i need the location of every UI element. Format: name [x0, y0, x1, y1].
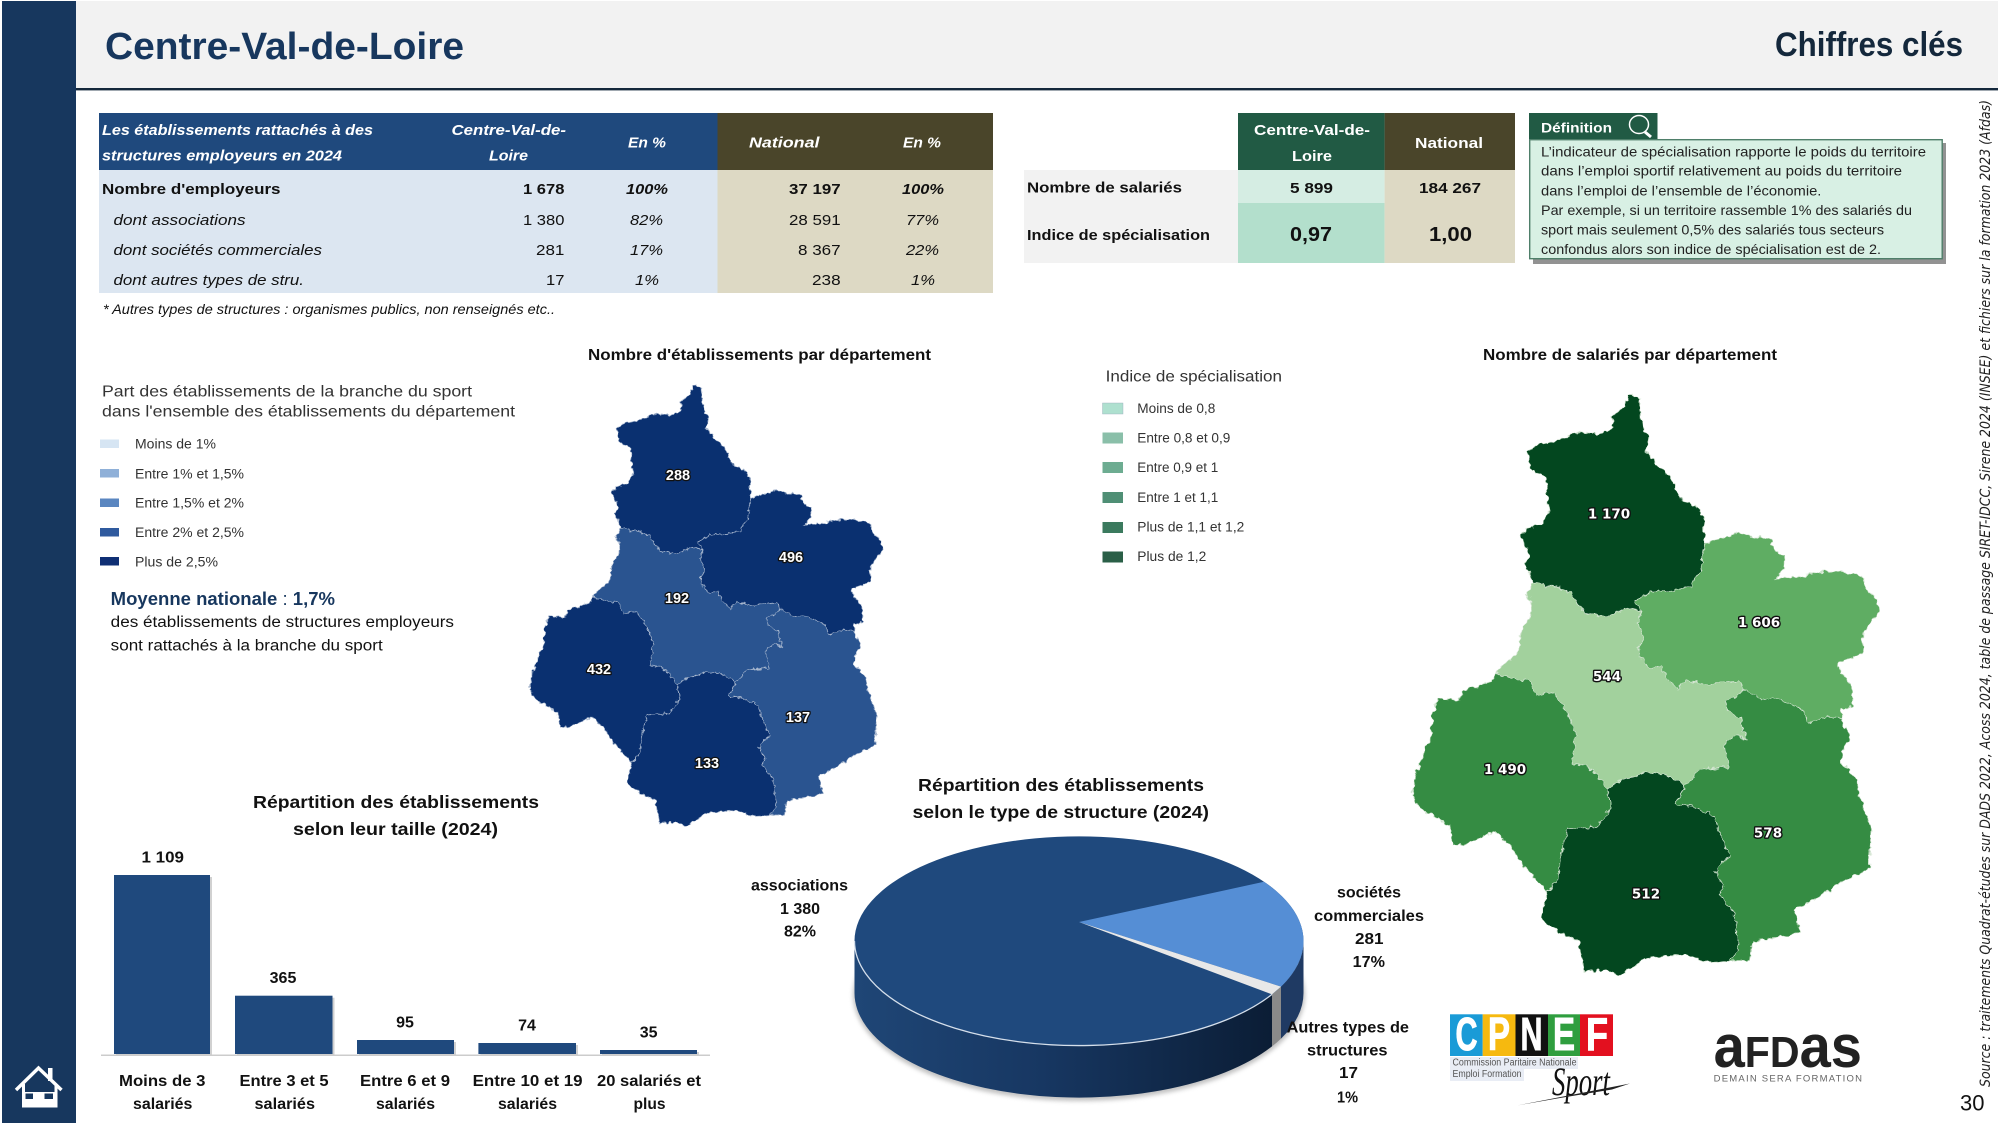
category labels: Entre 6 et 9 — [360, 1073, 450, 1090]
map labels: 1 490 — [1484, 762, 1526, 778]
table header: En % — [903, 135, 941, 152]
row: sociétés commerciales: dont sociétés commerciales — [114, 242, 323, 259]
row: autres types: dont autres types de stru. — [114, 272, 304, 289]
map labels: 496 — [779, 550, 803, 566]
definition text: dans l’emploi sportif relativement au poids du territoire — [1541, 163, 1902, 179]
table: salariés — [1024, 113, 1515, 263]
value labels: 35 — [640, 1025, 658, 1042]
row: sociétés commerciales — [114, 242, 939, 259]
category labels: 20 salariés et — [597, 1073, 702, 1090]
legend: part des établissements: Entre 2% et 2,5% — [135, 525, 244, 540]
row: associations: 77% — [906, 212, 939, 229]
table header: structures employeurs en 2024 — [102, 148, 343, 165]
category labels: Moins de 3 — [119, 1073, 206, 1090]
map labels: 288 — [666, 468, 690, 484]
chart title: selon le type de structure (2024) — [912, 802, 1209, 822]
header band — [76, 1, 1998, 90]
page number: 30 — [1960, 1091, 1984, 1116]
legend: indice de spécialisation: Entre 1 et 1,1 — [1137, 490, 1218, 505]
row: indice de spécialisation: 1,00 — [1429, 224, 1472, 246]
row: sociétés commerciales: 8 367 — [798, 242, 841, 259]
callout: définition — [1529, 113, 1946, 264]
3D pie — [853, 836, 1305, 1101]
logo: afdas: aFDas — [1714, 1013, 1862, 1080]
heading: map salariés: Nombre de salariés par département — [1483, 347, 1777, 364]
category labels: salariés — [498, 1096, 557, 1113]
title: Centre-Val-de-Loire — [105, 26, 464, 68]
row: employeurs: 100% — [626, 181, 668, 198]
row: associations: 82% — [630, 212, 663, 229]
label: associations: 1 380 — [780, 901, 820, 918]
row: indice de spécialisation: 0,97 — [1290, 224, 1332, 246]
chart title: selon leur taille (2024) — [293, 819, 498, 839]
row: employeurs: 37 197 — [789, 181, 841, 198]
logo: CPNEF: E — [1553, 1008, 1575, 1060]
label: associations: 82% — [784, 924, 816, 941]
legend: part des établissements: Plus de 2,5% — [135, 554, 218, 569]
category labels — [119, 1073, 702, 1113]
row: employeurs: Nombre d'employeurs — [102, 181, 280, 198]
table header — [102, 122, 941, 165]
category labels: Entre 10 et 19 — [473, 1073, 583, 1090]
legend: part des établissements: Entre 1,5% et 2% — [135, 496, 244, 511]
category labels: salariés — [133, 1096, 193, 1113]
map labels: 137 — [786, 710, 810, 726]
table: établissements — [99, 113, 993, 293]
row: employeurs: 1 678 — [523, 181, 564, 198]
row: sociétés commerciales: 17% — [630, 242, 663, 259]
label: associations: associations — [751, 878, 848, 895]
logo: CPNEF: Emploi Formation — [1452, 1069, 1522, 1080]
value labels: 95 — [396, 1015, 414, 1032]
sidebar — [2, 1, 76, 1123]
row: indice de spécialisation — [1027, 224, 1472, 246]
row: employeurs — [102, 181, 944, 198]
chart title — [253, 792, 539, 839]
value labels: 1 109 — [142, 850, 184, 867]
row: nombre de salariés: 184 267 — [1419, 180, 1481, 197]
logo: CPNEF: P — [1488, 1008, 1510, 1060]
row: associations: dont associations — [114, 212, 246, 229]
legend: indice de spécialisation: Entre 0,8 et 0,9 — [1137, 430, 1230, 446]
value labels — [142, 850, 658, 1042]
row: associations: 28 591 — [789, 212, 841, 229]
map labels: 192 — [665, 591, 689, 607]
map labels: 133 — [695, 756, 719, 772]
label: autres types de structures: structures — [1307, 1043, 1388, 1060]
icon: home — [16, 1068, 62, 1108]
row: nombre de salariés: Nombre de salariés — [1027, 180, 1182, 197]
legend: indice de spécialisation — [1102, 369, 1282, 564]
row: autres types: 1% — [635, 272, 659, 289]
definition text: L’indicateur de spécialisation rapporte le poids du territoire — [1541, 144, 1926, 160]
map: salariés par département — [1412, 393, 1879, 976]
category labels: salariés — [254, 1096, 315, 1113]
pie chart: type de structure — [751, 775, 1424, 1107]
map labels: 432 — [587, 662, 611, 678]
label: autres types de structures: 1% — [1337, 1090, 1358, 1107]
value labels: 74 — [518, 1018, 536, 1035]
legend: part des établissements — [100, 384, 516, 569]
row: autres types: 17 — [546, 272, 564, 289]
callout: moyenne nationale: des établissements de structures employeurs — [111, 614, 454, 631]
chart title: Répartition des établissements — [253, 792, 539, 812]
legend: part des établissements: dans l'ensemble des établissements du département — [102, 404, 516, 421]
map labels — [587, 468, 810, 772]
label: sociétés commerciales — [1314, 885, 1424, 971]
row: autres types: 1% — [911, 272, 935, 289]
bars — [114, 875, 699, 1054]
legend: indice de spécialisation: Moins de 0,8 — [1137, 401, 1215, 416]
row: nombre de salariés — [1027, 180, 1481, 197]
map labels: 1 170 — [1588, 506, 1630, 522]
category labels: Entre 3 et 5 — [240, 1073, 329, 1090]
map labels: 578 — [1754, 826, 1782, 842]
label: sociétés commerciales: commerciales — [1314, 908, 1424, 925]
definition text: sport mais seulement 0,5% des salariés tous secteurs — [1541, 222, 1884, 238]
definition text: Par exemple, si un territoire rassemble 1% des salariés du — [1541, 202, 1912, 218]
row: sociétés commerciales: 22% — [905, 242, 939, 259]
logo: afdas: DEMAIN SERA FORMATION — [1714, 1074, 1862, 1085]
icon: magnifier — [1630, 116, 1651, 137]
table: salariés: Centre-Val-de- — [1254, 122, 1370, 139]
label: autres types de structures: Autres types de — [1287, 1020, 1409, 1037]
logo: CPNEF: N — [1520, 1008, 1542, 1060]
label: autres types de structures — [1287, 1020, 1409, 1107]
legend: indice de spécialisation: Entre 0,9 et 1 — [1137, 460, 1218, 475]
table header: Les établissements rattachés à des — [102, 122, 373, 139]
table header: National — [749, 135, 820, 152]
label: sociétés commerciales: 281 — [1355, 931, 1384, 948]
heading: chiffres clés: Chiffres clés — [1775, 26, 1963, 64]
value labels: 365 — [270, 970, 296, 987]
row: employeurs: 100% — [902, 181, 944, 198]
table header: Loire — [489, 148, 528, 165]
legend: indice de spécialisation: Plus de 1,1 et 1,2 — [1137, 520, 1244, 534]
definition text — [1541, 144, 1926, 257]
heading: map établissements: Nombre d'établissements par département — [588, 347, 931, 364]
source note: Source : traitements Quadrat-études sur DADS 2022, Acoss 2024, table de passage SIRET-IDCC, Sirene 2024 (INSEE) et fichiers sur la formation 2023 (Afdas) — [1978, 100, 1994, 1087]
chart title — [912, 775, 1209, 822]
map labels: 544 — [1593, 669, 1621, 685]
row: associations — [114, 212, 939, 229]
definition text: dans l’emploi de l’ensemble de l’économie. — [1541, 183, 1821, 199]
table header: En % — [628, 135, 666, 152]
label: sociétés commerciales: sociétés — [1337, 885, 1401, 902]
row: nombre de salariés: 5 899 — [1290, 180, 1333, 197]
legend: indice de spécialisation: Plus de 1,2 — [1137, 549, 1206, 564]
chart title: Répartition des établissements — [918, 775, 1204, 795]
logo: CPNEF: F — [1586, 1008, 1608, 1060]
row: associations: 1 380 — [523, 212, 564, 229]
legend: part des établissements: Part des établissements de la branche du sport — [102, 384, 473, 401]
row: autres types: 238 — [812, 272, 841, 289]
footnote: * Autres types de structures : organismes publics, non renseignés etc.. — [103, 302, 555, 317]
map: établissements par département — [529, 384, 883, 827]
bar chart: taille — [101, 792, 710, 1113]
table header: Centre-Val-de- — [452, 122, 566, 139]
callout: moyenne nationale — [111, 588, 454, 655]
logo: CPNEF: C — [1456, 1008, 1478, 1060]
map labels: 1 606 — [1738, 615, 1780, 631]
logo: CPNEF — [1450, 1008, 1630, 1106]
category labels: salariés — [376, 1096, 435, 1113]
table: salariés: National — [1415, 135, 1483, 152]
callout: moyenne nationale: Moyenne nationale : 1,7% — [111, 588, 335, 609]
category labels: plus — [634, 1096, 666, 1113]
legend: part des établissements: Moins de 1% — [135, 437, 216, 452]
definition text: confondus alors son indice de spécialisation est de 2. — [1541, 241, 1881, 257]
legend: part des établissements: Entre 1% et 1,5% — [135, 466, 244, 481]
row: autres types — [114, 272, 935, 289]
row: sociétés commerciales: 281 — [536, 242, 564, 259]
logo: CPNEF: Sport — [1552, 1059, 1611, 1104]
label: sociétés commerciales: 17% — [1353, 954, 1385, 971]
table: salariés: Loire — [1292, 148, 1332, 165]
label: autres types de structures: 17 — [1339, 1065, 1358, 1082]
callout: moyenne nationale: sont rattachés à la branche du sport — [111, 638, 383, 655]
legend: indice de spécialisation: Indice de spécialisation — [1106, 369, 1282, 386]
map labels — [1484, 506, 1782, 902]
label: associations — [751, 878, 848, 941]
logo: CPNEF: Commission Paritaire Nationale — [1452, 1058, 1577, 1068]
map labels: 512 — [1632, 886, 1660, 902]
row: indice de spécialisation: Indice de spécialisation — [1027, 227, 1210, 244]
callout: définition: Définition — [1541, 120, 1612, 136]
